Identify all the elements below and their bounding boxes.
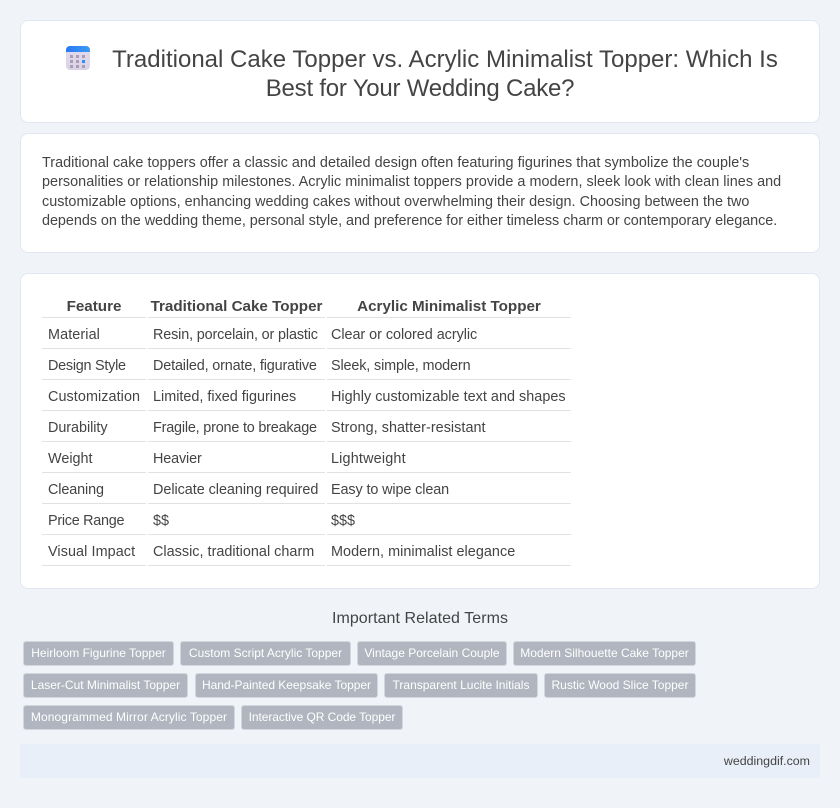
- footer source: weddingdif.com: [724, 754, 810, 768]
- icon: calendar: [66, 46, 90, 70]
- related terms heading: Important Related Terms: [332, 610, 508, 627]
- comparison table: Customization: [48, 389, 140, 405]
- comparison table: Limited, fixed figurines: [153, 389, 296, 405]
- related term tags: Laser-Cut Minimalist Topper: [31, 678, 180, 692]
- related term tags: Interactive QR Code Topper: [249, 710, 395, 724]
- comparison table: Material: [48, 327, 100, 343]
- comparison table: [42, 298, 571, 566]
- comparison table: Visual Impact: [48, 544, 135, 560]
- comparison table: Design Style: [48, 358, 126, 374]
- intro text: [42, 155, 781, 229]
- comparison table: Acrylic Minimalist Topper: [357, 298, 541, 315]
- related term tags: Rustic Wood Slice Topper: [552, 678, 688, 692]
- intro text: personalities or relationship milestones. Acrylic minimalist toppers provide a modern, sleek look with clean lines and: [42, 174, 781, 190]
- related term tags: Transparent Lucite Initials: [393, 678, 529, 692]
- comparison table: Weight: [48, 451, 93, 467]
- intro text: depends on the wedding theme, personal style, and preference for either timeless charm or contemporary elegance.: [42, 213, 777, 229]
- intro card: [20, 133, 820, 253]
- header card: [20, 20, 820, 123]
- related term tags: Heirloom Figurine Topper: [31, 646, 166, 660]
- comparison table: Price Range: [48, 513, 124, 529]
- comparison table: Feature: [67, 298, 121, 315]
- comparison table: Traditional Cake Topper: [151, 298, 322, 315]
- footer bar: [20, 744, 820, 778]
- related term tags: Hand-Painted Keepsake Topper: [202, 678, 371, 692]
- title: [112, 46, 778, 102]
- comparison table: Delicate cleaning required: [153, 482, 318, 498]
- related term tags: Modern Silhouette Cake Topper: [520, 646, 689, 660]
- comparison table: Sleek, simple, modern: [331, 358, 470, 374]
- table card: [20, 273, 820, 589]
- related term tags: Custom Script Acrylic Topper: [189, 646, 342, 660]
- related term tags: Vintage Porcelain Couple: [364, 646, 500, 660]
- comparison table: Fragile, prone to breakage: [153, 420, 317, 436]
- comparison table: Highly customizable text and shapes: [331, 389, 566, 405]
- comparison table: Clear or colored acrylic: [331, 327, 477, 343]
- title: Traditional Cake Topper vs. Acrylic Minimalist Topper: Which Is: [112, 46, 778, 73]
- title: Best for Your Wedding Cake?: [266, 75, 574, 102]
- comparison table: Resin, porcelain, or plastic: [153, 327, 318, 343]
- comparison table: Classic, traditional charm: [153, 544, 314, 560]
- comparison table: Cleaning: [48, 482, 104, 498]
- comparison table: Durability: [48, 420, 107, 436]
- comparison table: $$$: [331, 513, 355, 529]
- comparison table: Heavier: [153, 451, 202, 467]
- intro text: Traditional cake toppers offer a classic and detailed design often featuring figurines that symbolize the couple's: [42, 155, 749, 171]
- comparison table: Lightweight: [331, 451, 406, 467]
- comparison table: Strong, shatter-resistant: [331, 420, 486, 436]
- comparison table: Easy to wipe clean: [331, 482, 449, 498]
- comparison table: $$: [153, 513, 169, 529]
- related term tags: Monogrammed Mirror Acrylic Topper: [31, 710, 227, 724]
- intro text: customizable options, enhancing wedding cakes without overwhelming their design. Choosing between the two: [42, 194, 749, 210]
- comparison table: Detailed, ornate, figurative: [153, 358, 317, 374]
- comparison table: Modern, minimalist elegance: [331, 544, 515, 560]
